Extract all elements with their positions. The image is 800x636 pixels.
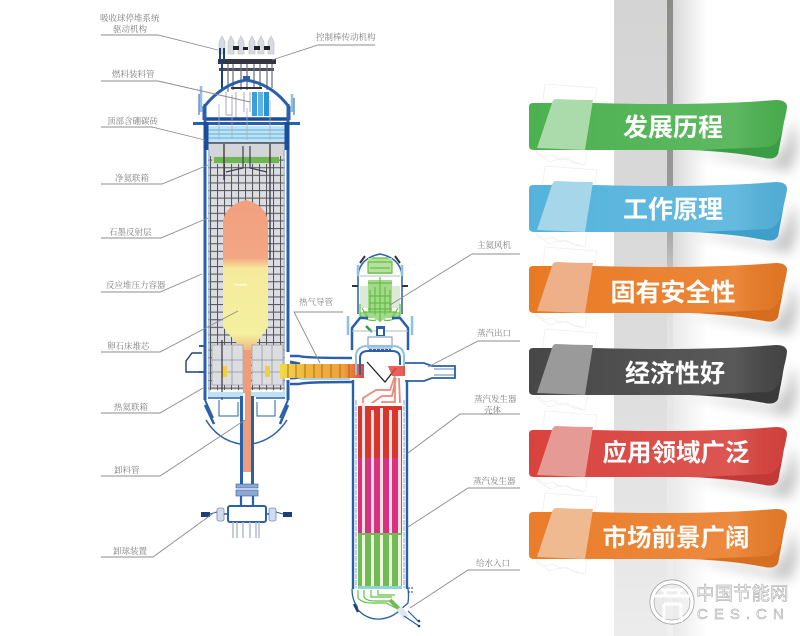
boronated carbon bricks (208, 100, 285, 143)
tube bundle (358, 403, 402, 587)
label: steam generator shell: 壳体 (484, 405, 502, 415)
ribbon: wide applications (529, 411, 798, 499)
ball discharge device (201, 506, 292, 538)
label: absorber ball shutdown drive: 吸收球停堆系统 (100, 13, 160, 23)
ribbon: development history: 发展历程 (623, 114, 723, 142)
ribbon: broad market prospects: 市场前景广阔 (602, 524, 750, 552)
shell (356, 403, 404, 589)
ribbon: working principle (529, 166, 798, 254)
label: discharge tube (101, 420, 245, 476)
watermark: site logo: CES.CN (697, 606, 790, 623)
bottom head (206, 420, 287, 444)
label: top boronated carbon brick (101, 116, 205, 140)
label: pebble bed core: 卵石床堆芯 (107, 341, 150, 351)
discharge pipe (236, 350, 258, 507)
label: hot gas duct (294, 297, 343, 363)
side nozzle (186, 353, 202, 372)
icon: logo circle (650, 580, 694, 624)
vessel flange and walls (193, 122, 300, 125)
lower graphite blocks (212, 340, 283, 400)
upper head dome (204, 80, 289, 120)
label: discharge tube: 卸料管 (114, 465, 140, 475)
label: steam outlet (428, 328, 520, 367)
watermark: site logo (650, 580, 790, 624)
reactor pressure vessel (186, 36, 300, 538)
label: cold helium plenum (101, 165, 208, 184)
label: reactor pressure vessel: 反应堆压力容器 (106, 280, 166, 290)
label: ball discharge device (101, 512, 215, 557)
label: steam generator (408, 476, 520, 527)
hot gas duct (280, 355, 364, 384)
ribbon: inherent safety: 固有安全性 (610, 279, 736, 307)
label: absorber ball shutdown drive (100, 13, 218, 50)
label: cold helium plenum: 净氦联箱 (115, 173, 150, 183)
steam outlet (405, 363, 455, 381)
isolation baffle (367, 362, 396, 382)
label: fuel charging tube: 燃料装料管 (112, 69, 155, 79)
label: control rod drive (272, 32, 376, 60)
ribbon: wide applications: 应用领域广泛 (602, 438, 750, 467)
tube connections (363, 376, 400, 410)
label: feed water inlet (410, 558, 520, 608)
background: grey vertical band (614, 0, 707, 636)
label: ball discharge device: 卸球装置 (113, 546, 148, 556)
fuel charging tubes (226, 88, 269, 118)
label: reactor pressure vessel (101, 274, 202, 292)
label: graphite reflector (101, 218, 208, 238)
label: main helium blower (390, 240, 520, 305)
drive mechanism (218, 36, 276, 92)
label: pebble bed core (101, 311, 238, 352)
hot helium plenum (205, 392, 288, 418)
ribbon: good economics (529, 329, 798, 417)
watermark: site logo: 中国节能网 (696, 583, 789, 604)
label: steam generator: 蒸汽发生器 (473, 476, 516, 486)
label: steam generator shell: 蒸汽发生器 (474, 394, 517, 404)
label: steam outlet: 蒸汽出口 (477, 328, 511, 338)
ribbon: good economics: 经济性好 (625, 360, 725, 388)
ribbon: development history (529, 84, 798, 172)
ribbon: broad market prospects (529, 493, 798, 581)
steam generator (348, 316, 455, 627)
label: absorber ball shutdown drive: 驱动机构 (113, 24, 148, 34)
label: graphite reflector: 石墨反射层 (109, 227, 152, 237)
cold helium plenum (214, 157, 279, 163)
ribbon: inherent safety (529, 247, 798, 335)
label: hot helium plenum: 热氦联箱 (114, 402, 149, 412)
ribbon: working principle: 工作原理 (623, 196, 723, 224)
label: top boronated carbon brick: 顶部含硼碳砖 (107, 116, 159, 126)
label: hot helium plenum (101, 388, 203, 413)
graphite reflector grid (208, 150, 285, 390)
main helium blower (352, 254, 408, 332)
label: feed water inlet: 给水入口 (476, 558, 510, 568)
feed water bottom head (352, 588, 420, 627)
label: main helium blower: 主氦风机 (477, 240, 512, 250)
pebble bed core (223, 200, 268, 356)
label: hot gas duct: 热气导管 (299, 297, 334, 307)
label: fuel charging tube (101, 69, 250, 102)
label: steam generator shell (408, 394, 520, 453)
label: control rod drive: 控制棒传动机构 (316, 32, 376, 42)
